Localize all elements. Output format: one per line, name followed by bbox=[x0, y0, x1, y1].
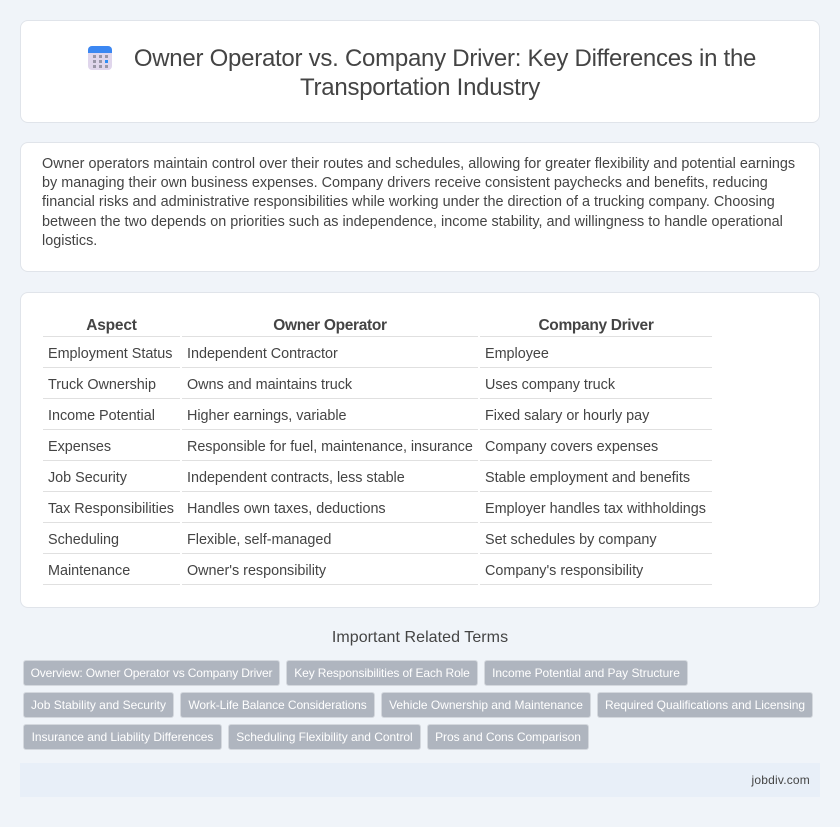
text block: introduction: Owner operators maintain control over their routes and schedules, allowing for greater flexibility and potential earnings bbox=[42, 156, 795, 172]
table: comparison: Higher earnings, variable bbox=[187, 408, 346, 424]
table: comparison: Handles own taxes, deductions bbox=[187, 501, 386, 517]
table: comparison: Set schedules by company bbox=[485, 532, 657, 548]
icon: calendar bbox=[88, 46, 112, 70]
table: comparison: Uses company truck bbox=[485, 377, 615, 393]
tag: Scheduling Flexibility and Control bbox=[236, 730, 413, 744]
table: comparison: Stable employment and benefits bbox=[485, 470, 690, 486]
table: comparison: Employee bbox=[485, 346, 549, 362]
tags: related terms bbox=[23, 660, 813, 750]
tag bbox=[23, 692, 174, 718]
table header: aspect: Aspect bbox=[86, 317, 137, 334]
tag: Overview: Owner Operator vs Company Driver bbox=[31, 666, 272, 680]
table: comparison: Independent Contractor bbox=[187, 346, 338, 362]
tag bbox=[427, 724, 589, 750]
tag bbox=[23, 660, 280, 686]
tag bbox=[381, 692, 591, 718]
table: comparison: Scheduling bbox=[48, 532, 119, 548]
table: comparison: Owner's responsibility bbox=[187, 563, 326, 579]
table: comparison: Independent contracts, less stable bbox=[187, 470, 405, 486]
heading: related terms: Important Related Terms bbox=[332, 629, 508, 646]
table header: owner operator: Owner Operator bbox=[273, 317, 387, 334]
panel: comparison table bbox=[20, 292, 820, 608]
table: comparison: Job Security bbox=[48, 470, 127, 486]
table: comparison: Employment Status bbox=[48, 346, 172, 362]
text block: introduction: between the two depends on priorities such as independence, income stability, and willingness to handle operational bbox=[42, 214, 783, 230]
title: Owner Operator vs. Company Driver: Key Differences in the bbox=[134, 45, 756, 72]
table: comparison: Tax Responsibilities bbox=[48, 501, 174, 517]
tag: Work-Life Balance Considerations bbox=[188, 698, 367, 712]
table header: company driver: Company Driver bbox=[538, 317, 654, 334]
table: comparison: Expenses bbox=[48, 439, 111, 455]
tag bbox=[180, 692, 375, 718]
tag: Vehicle Ownership and Maintenance bbox=[389, 698, 583, 712]
text block: introduction: logistics. bbox=[42, 233, 97, 249]
tag bbox=[286, 660, 478, 686]
table: comparison: Maintenance bbox=[48, 563, 130, 579]
title: Transportation Industry bbox=[300, 74, 540, 101]
footer source: jobdiv.com bbox=[752, 773, 810, 787]
tag: Income Potential and Pay Structure bbox=[492, 666, 680, 680]
table: comparison: Flexible, self-managed bbox=[187, 532, 331, 548]
table: comparison: Company covers expenses bbox=[485, 439, 658, 455]
table: comparison: Truck Ownership bbox=[48, 377, 156, 393]
tag: Job Stability and Security bbox=[31, 698, 166, 712]
tag bbox=[484, 660, 688, 686]
table: comparison: Owns and maintains truck bbox=[187, 377, 352, 393]
tag bbox=[228, 724, 421, 750]
table: comparison bbox=[43, 317, 712, 585]
table: comparison: Fixed salary or hourly pay bbox=[485, 408, 649, 424]
tag bbox=[23, 724, 222, 750]
panel: introduction bbox=[20, 142, 820, 272]
footer bbox=[20, 763, 820, 797]
text block: introduction: by managing their own business expenses. Company drivers receive consistent paychecks and benefits, reducing bbox=[42, 175, 768, 191]
tag: Required Qualifications and Licensing bbox=[605, 698, 805, 712]
title bbox=[134, 45, 756, 101]
panel: header bbox=[20, 20, 820, 123]
table: comparison: Responsible for fuel, maintenance, insurance bbox=[187, 439, 473, 455]
tag: Pros and Cons Comparison bbox=[435, 730, 581, 744]
text block: introduction: financial risks and administrative responsibilities while working under the direction of a trucking company. Choosing bbox=[42, 194, 775, 210]
tag bbox=[597, 692, 813, 718]
table: comparison: Company's responsibility bbox=[485, 563, 643, 579]
tag: Key Responsibilities of Each Role bbox=[294, 666, 470, 680]
text block: introduction bbox=[42, 156, 795, 249]
table: comparison: Employer handles tax withholdings bbox=[485, 501, 706, 517]
table: comparison: Income Potential bbox=[48, 408, 155, 424]
tag: Insurance and Liability Differences bbox=[32, 730, 213, 744]
